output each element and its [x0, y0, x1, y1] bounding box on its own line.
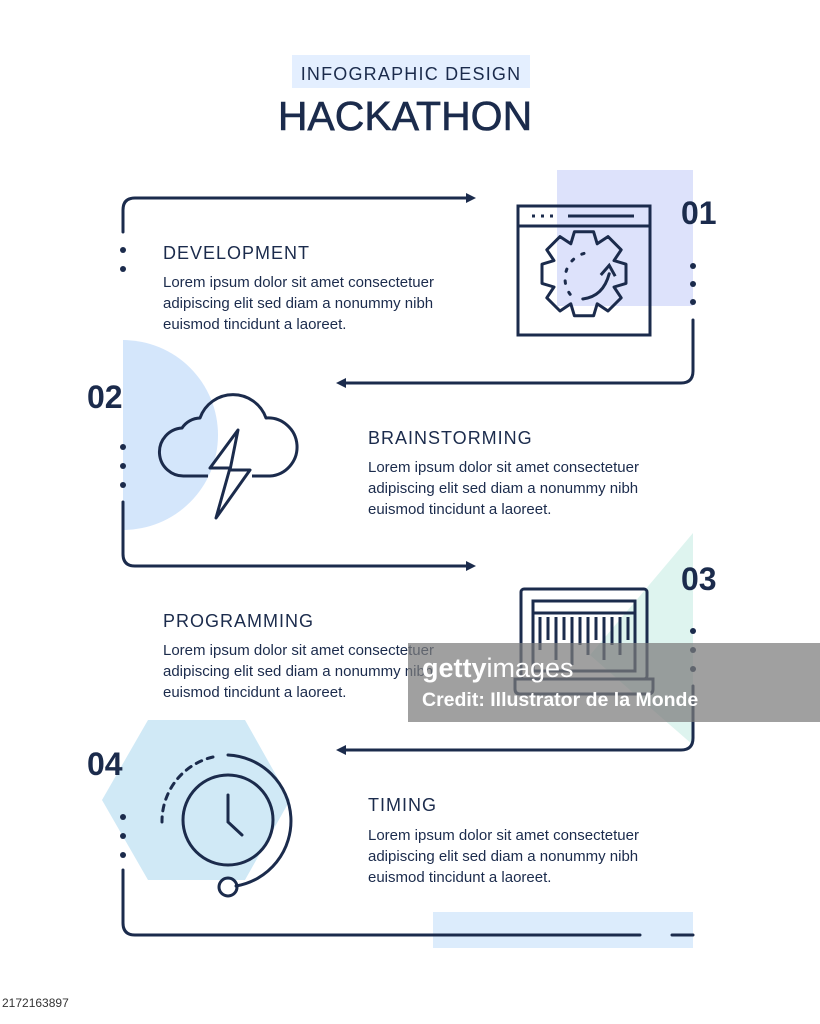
step 01: development: Lorem ipsum dolor sit amet consectetuer [163, 274, 434, 291]
step 04: timing: TIMING [368, 795, 437, 815]
step 01: development: euismod tincidunt a laoreet. [163, 316, 346, 333]
step 01: development [163, 195, 717, 333]
icon: laptop code [515, 589, 653, 694]
step 03: programming: 03 [681, 561, 717, 597]
image id: 2172163897 [2, 996, 69, 1010]
watermark: gettyimages [422, 653, 574, 683]
connector lines and arrows [123, 198, 693, 935]
title [278, 55, 532, 139]
step 04: timing [87, 746, 639, 886]
step 04: timing: 04 [87, 746, 123, 782]
step 03: programming: Lorem ipsum dolor sit amet consectetuer [163, 642, 434, 659]
step 04: timing: Lorem ipsum dolor sit amet consectetuer [368, 827, 639, 844]
step 04: timing: euismod tincidunt a laoreet. [368, 869, 551, 886]
icon: clock [162, 755, 291, 896]
title: INFOGRAPHIC DESIGN [301, 64, 521, 84]
icon: browser gear [518, 206, 650, 335]
title: HACKATHON [278, 93, 532, 139]
step 01: development: DEVELOPMENT [163, 243, 310, 263]
step 03: programming [163, 561, 717, 701]
decorative shapes [102, 170, 693, 948]
step 02: brainstorming [87, 379, 639, 518]
step 02: brainstorming: euismod tincidunt a laoreet. [368, 501, 551, 518]
step 01: development: adipiscing elit sed diam a nonummy nibh [163, 295, 433, 312]
step 02: brainstorming: adipiscing elit sed diam a nonummy nibh [368, 480, 638, 497]
step 02: brainstorming: Lorem ipsum dolor sit amet consectetuer [368, 459, 639, 476]
watermark [408, 643, 820, 722]
step 01: development: 01 [681, 195, 717, 231]
step 03: programming: adipiscing elit sed diam a nonummy nibh [163, 663, 433, 680]
step 02: brainstorming: BRAINSTORMING [368, 428, 533, 448]
step 03: programming: PROGRAMMING [163, 611, 314, 631]
step 02: brainstorming: 02 [87, 379, 123, 415]
step 04: timing: adipiscing elit sed diam a nonummy nibh [368, 848, 638, 865]
icon: cloud lightning [159, 395, 297, 518]
step 03: programming: euismod tincidunt a laoreet. [163, 684, 346, 701]
watermark: Credit: Illustrator de la Monde [422, 689, 698, 711]
